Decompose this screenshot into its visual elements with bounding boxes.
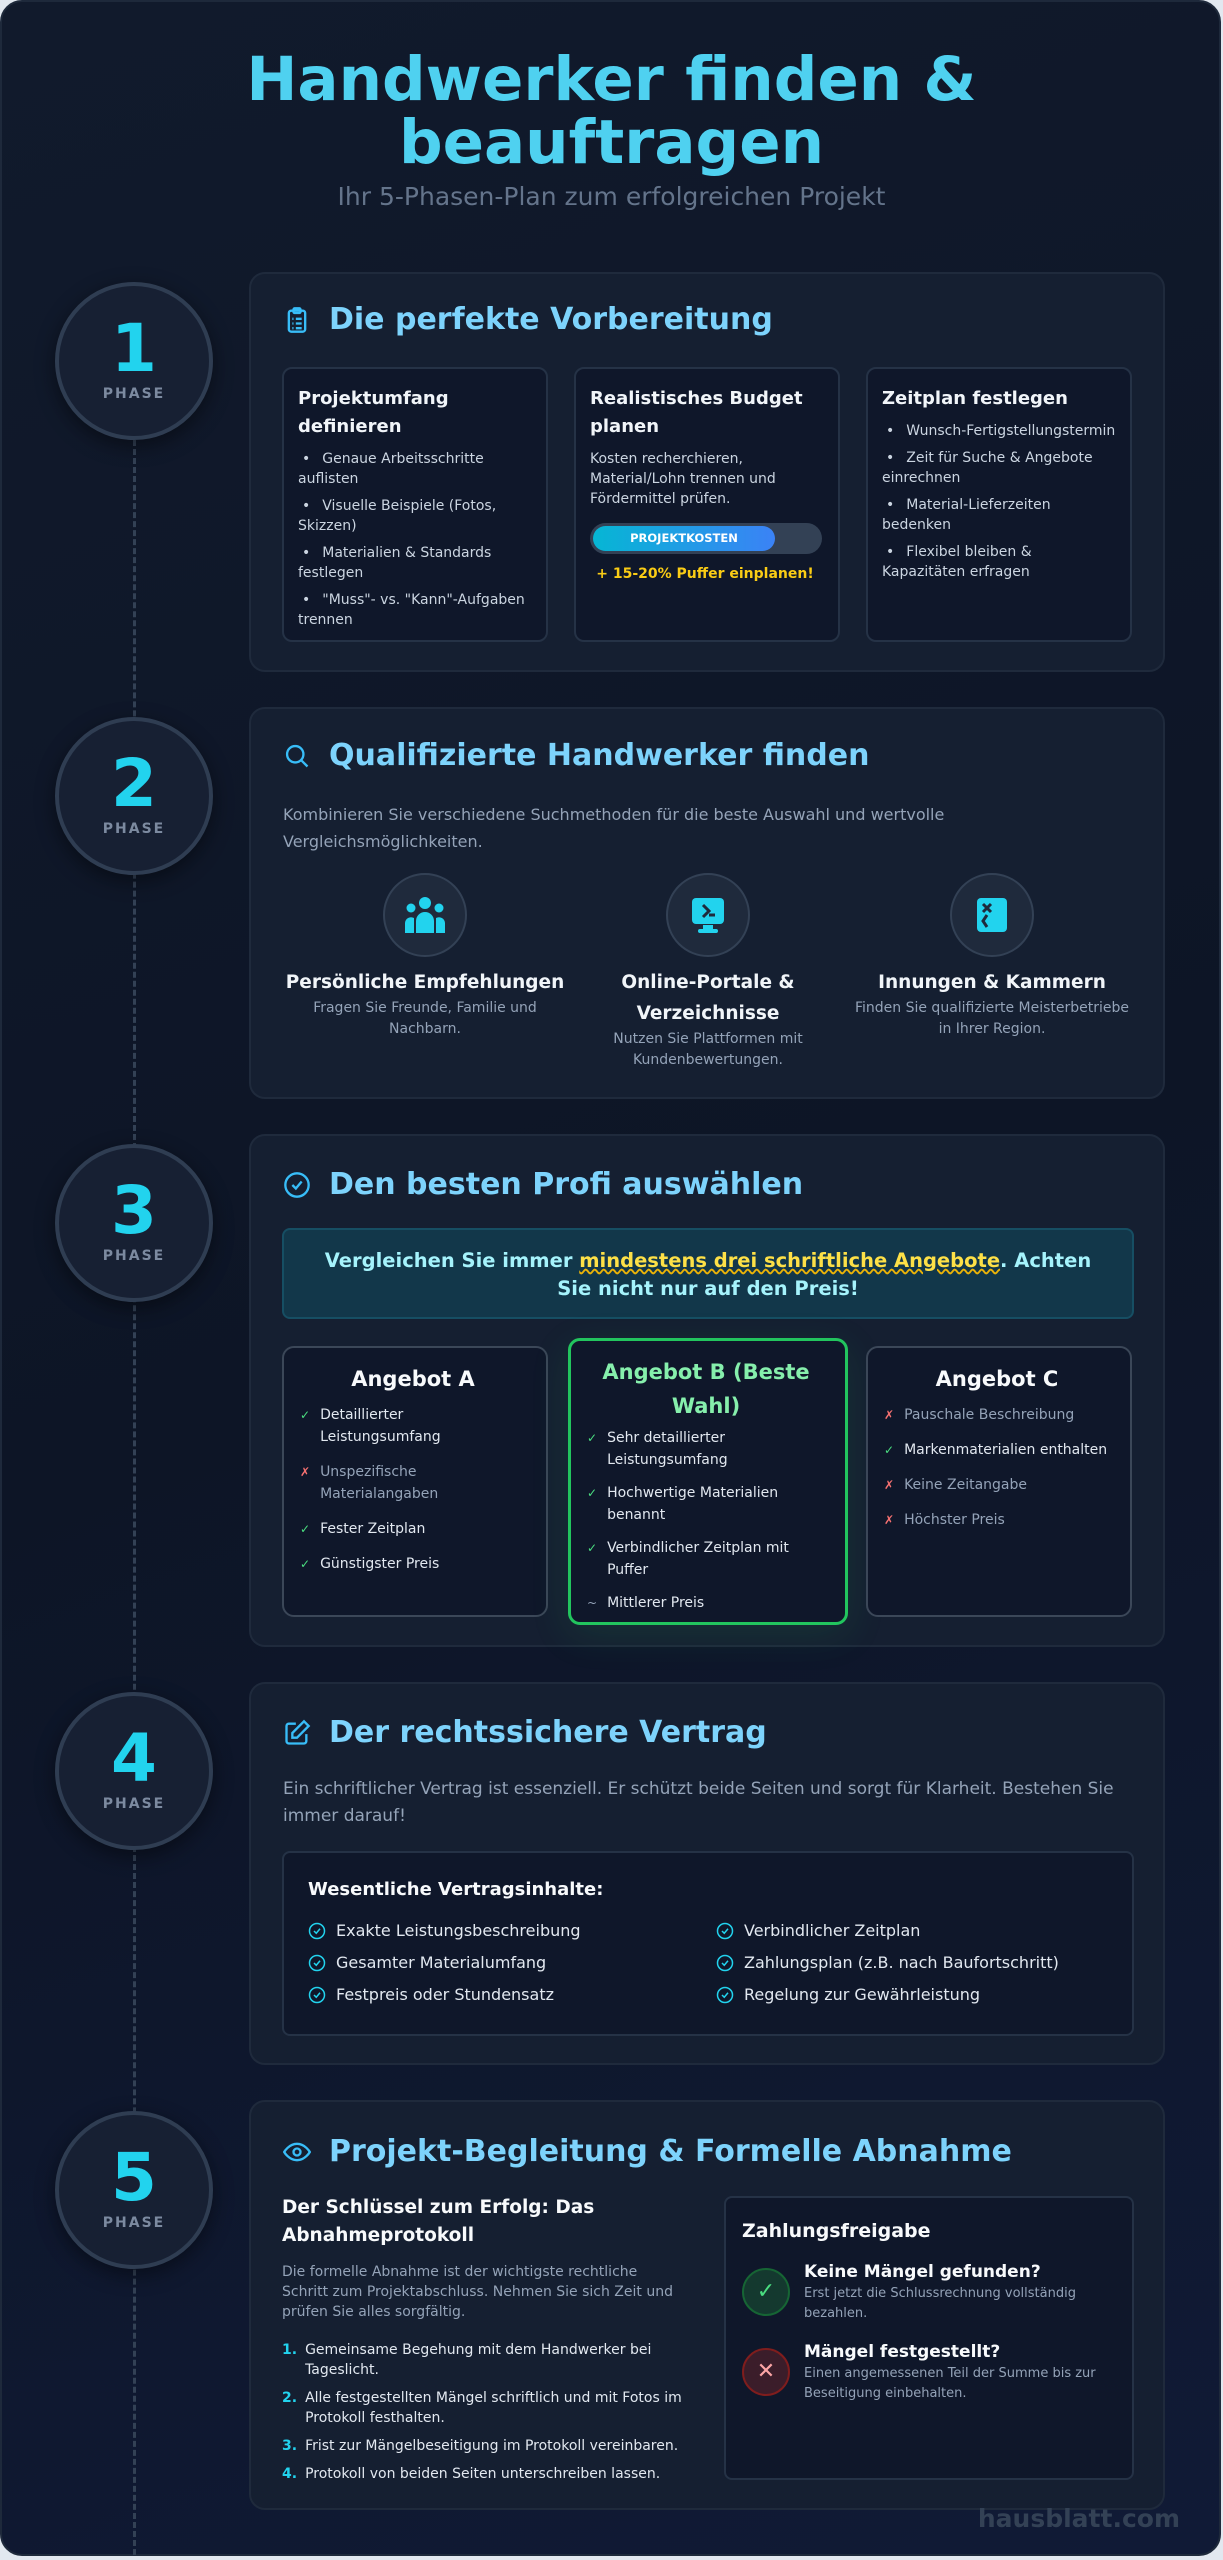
timeline dashed line bbox=[133, 440, 136, 2555]
card: Projektumfang: Genaue Arbeitsschritte auflisten bbox=[298, 451, 484, 487]
box: Vertragsinhalte: Festpreis oder Stundensatz bbox=[336, 1985, 554, 2004]
offer C: Pauschale Beschreibung bbox=[904, 1407, 1074, 1423]
heading phase 3: Den besten Profi auswählen bbox=[329, 1167, 803, 1202]
offer A: Fester Zeitplan bbox=[320, 1521, 425, 1537]
callout: drei Angebote: Vergleichen Sie immer mindestens drei schriftliche Angebote. Achten Sie nicht nur auf den Preis! bbox=[325, 1249, 1091, 1300]
icon: people bbox=[383, 873, 467, 957]
offer C: Höchster Preis bbox=[904, 1512, 1005, 1528]
item: Mängel festgestellt: Mängel festgestellt? bbox=[804, 2342, 1000, 2362]
card: Projektumfang: "Muss"- vs. "Kann"-Aufgaben trennen bbox=[298, 592, 525, 628]
icon: certificate bbox=[950, 873, 1034, 957]
phase 3 badge: 3 bbox=[111, 1172, 157, 1249]
callout: drei Angebote bbox=[282, 1228, 1134, 1319]
box: Vertragsinhalte: Gesamter Materialumfang bbox=[336, 1953, 546, 1972]
card: Projektumfang: Materialien & Standards festlegen bbox=[298, 545, 491, 581]
heading phase 4: Der rechtssichere Vertrag bbox=[329, 1715, 767, 1750]
footer brand: hausblatt.com bbox=[978, 2504, 1180, 2533]
method: Innungen: Innungen & Kammern bbox=[878, 972, 1106, 993]
heading phase 5: Projekt-Begleitung & Formelle Abnahme bbox=[329, 2134, 1012, 2169]
offer B best: Angebot B (Beste Wahl) bbox=[602, 1360, 810, 1418]
text block: Abnahmeprotokoll: Alle festgestellten Mängel schriftlich und mit Fotos im Protokoll festhalten. bbox=[305, 2390, 682, 2426]
panel: phase 1 Vorbereitung bbox=[249, 272, 1165, 672]
offer B best bbox=[568, 1338, 848, 1625]
offer B best: ✓ bbox=[587, 1431, 597, 1445]
card: Projektumfang: Projektumfang definieren bbox=[298, 388, 449, 437]
budget bar: PROJEKTKOSTEN bbox=[630, 531, 738, 545]
offer A: ✗ bbox=[300, 1465, 310, 1479]
phase 4 badge bbox=[55, 1692, 213, 1850]
offer C: ✗ bbox=[884, 1513, 894, 1527]
panel: phase 4 Vertrag bbox=[249, 1682, 1165, 2065]
method: Online-Portale: Online-Portale & bbox=[621, 972, 795, 993]
offer B best: Verbindlicher Zeitplan mit Puffer bbox=[607, 1540, 789, 1578]
method: Empfehlungen bbox=[286, 873, 564, 1037]
card: Zeitplan: Zeitplan festlegen bbox=[882, 388, 1068, 409]
offer B best: ✓ bbox=[587, 1541, 597, 1555]
phase 5 badge: 5 bbox=[111, 2139, 157, 2216]
card: Zeitplan bbox=[866, 367, 1132, 642]
offer C: ✗ bbox=[884, 1408, 894, 1422]
item: keine Mängel: Keine Mängel gefunden? bbox=[804, 2262, 1041, 2282]
box: Zahlungsfreigabe bbox=[724, 2196, 1134, 2480]
item: Mängel festgestellt bbox=[742, 2342, 1096, 2401]
phase 3 badge: PHASE bbox=[103, 1248, 165, 1264]
phase 1 badge: PHASE bbox=[103, 386, 165, 402]
offer A bbox=[282, 1346, 548, 1617]
box: Vertragsinhalte: Verbindlicher Zeitplan bbox=[744, 1921, 920, 1940]
buffer note: + 15-20% Puffer einplanen! bbox=[596, 566, 814, 582]
text block: Abnahmeprotokoll: Protokoll von beiden Seiten unterschreiben lassen. bbox=[305, 2466, 660, 2482]
card: Projektumfang: Visuelle Beispiele (Fotos, Skizzen) bbox=[298, 498, 496, 534]
method: Online-Portale: Verzeichnisse bbox=[637, 1003, 779, 1024]
panel: phase 2 Handwerker finden bbox=[249, 707, 1165, 1099]
text block: Abnahmeprotokoll: Die formelle Abnahme ist der wichtigste rechtliche Schritt zum Projektabschluss. Nehmen Sie sich Zeit und prüfen Sie alles sorgfältig. bbox=[282, 2264, 673, 2320]
offer A: Günstigster Preis bbox=[320, 1556, 439, 1572]
budget bar bbox=[590, 523, 822, 554]
offer B best: Sehr detaillierter Leistungsumfang bbox=[607, 1430, 728, 1468]
text block: Abnahmeprotokoll: 2. bbox=[282, 2390, 297, 2406]
panel: phase 5 Abnahme bbox=[249, 2100, 1165, 2510]
card: Zeitplan: Zeit für Suche & Angebote einrechnen bbox=[882, 450, 1093, 486]
method: Online-Portale bbox=[613, 873, 803, 1068]
offer A: Angebot A bbox=[351, 1367, 475, 1391]
item: keine Mängel: ✓ bbox=[757, 2279, 775, 2304]
card: Projektumfang bbox=[282, 367, 548, 642]
phase 4 badge: 4 bbox=[111, 1720, 157, 1797]
phase 3 badge bbox=[55, 1144, 213, 1302]
item: keine Mängel bbox=[742, 2262, 1076, 2321]
box: Zahlungsfreigabe: Zahlungsfreigabe bbox=[742, 2220, 931, 2242]
heading phase 2: Qualifizierte Handwerker finden bbox=[329, 738, 869, 773]
item: Mängel festgestellt: ✕ bbox=[757, 2359, 775, 2384]
offer C: ✓ bbox=[884, 1443, 894, 1457]
offer A: ✓ bbox=[300, 1408, 310, 1422]
title: beauftragen bbox=[399, 107, 824, 178]
icon: monitor bbox=[666, 873, 750, 957]
text block: Abnahmeprotokoll: 4. bbox=[282, 2466, 297, 2482]
offer A: Unspezifische Materialangaben bbox=[320, 1464, 438, 1502]
item: Mängel festgestellt: Einen angemessenen Teil der Summe bis zur Beseitigung einbehalten. bbox=[804, 2366, 1096, 2401]
title bbox=[246, 44, 977, 178]
phase 2 badge: 2 bbox=[111, 745, 157, 822]
phase 5 badge: PHASE bbox=[103, 2215, 165, 2231]
text block: Abnahmeprotokoll: Frist zur Mängelbeseitigung im Protokoll vereinbaren. bbox=[305, 2438, 678, 2454]
method: Empfehlungen: Fragen Sie Freunde, Familie und Nachbarn. bbox=[313, 1000, 537, 1037]
heading phase 1: Die perfekte Vorbereitung bbox=[329, 302, 773, 337]
card: Zeitplan: Flexibel bleiben & Kapazitäten erfragen bbox=[882, 544, 1032, 580]
phase 2 badge bbox=[55, 717, 213, 875]
box: Vertragsinhalte: Wesentliche Vertragsinhalte: bbox=[308, 1879, 603, 1900]
method: Online-Portale: Nutzen Sie Plattformen mit Kundenbewertungen. bbox=[613, 1031, 803, 1068]
offer B best: Mittlerer Preis bbox=[607, 1595, 704, 1611]
box: Vertragsinhalte: Regelung zur Gewährleistung bbox=[744, 1985, 980, 2004]
text block: Abnahmeprotokoll: Der Schlüssel zum Erfolg: Das Abnahmeprotokoll bbox=[282, 2197, 594, 2246]
phase 1 badge bbox=[55, 282, 213, 440]
phase 5 badge bbox=[55, 2111, 213, 2269]
offer A: Detaillierter Leistungsumfang bbox=[320, 1407, 441, 1445]
text block: Abnahmeprotokoll bbox=[282, 2197, 682, 2482]
box: Vertragsinhalte: Exakte Leistungsbeschreibung bbox=[336, 1921, 581, 1940]
card: Zeitplan: Material-Lieferzeiten bedenken bbox=[882, 497, 1051, 533]
title: Handwerker finden & bbox=[246, 44, 977, 115]
offer A: ✓ bbox=[300, 1557, 310, 1571]
text block: Abnahmeprotokoll: Gemeinsame Begehung mit dem Handwerker bei Tageslicht. bbox=[305, 2342, 651, 2378]
card: Budget: Realistisches Budget planen bbox=[590, 388, 803, 437]
text block: Abnahmeprotokoll: 1. bbox=[282, 2342, 297, 2358]
card: Zeitplan: Wunsch-Fertigstellungstermin bbox=[906, 423, 1115, 439]
phase 1 badge: 1 bbox=[111, 310, 157, 387]
offer C: Angebot C bbox=[936, 1367, 1058, 1391]
offer B best: ✓ bbox=[587, 1486, 597, 1500]
subtitle: Ihr 5-Phasen-Plan zum erfolgreichen Projekt bbox=[338, 182, 885, 211]
description phase 2: Kombinieren Sie verschiedene Suchmethoden für die beste Auswahl und wertvolle Vergleichsmöglichkeiten. bbox=[283, 805, 944, 851]
text block: Abnahmeprotokoll: 3. bbox=[282, 2438, 297, 2454]
method: Empfehlungen: Persönliche Empfehlungen bbox=[286, 972, 564, 993]
method: Innungen: Finden Sie qualifizierte Meisterbetriebe in Ihrer Region. bbox=[855, 1000, 1129, 1037]
box: Vertragsinhalte: Zahlungsplan (z.B. nach Baufortschritt) bbox=[744, 1953, 1059, 1972]
phase 2 badge: PHASE bbox=[103, 821, 165, 837]
offer A: ✓ bbox=[300, 1522, 310, 1536]
offer B best: ~ bbox=[587, 1596, 597, 1610]
card: Budget: Kosten recherchieren, Material/Lohn trennen und Fördermittel prüfen. bbox=[590, 451, 776, 507]
offer C: ✗ bbox=[884, 1478, 894, 1492]
card: Budget bbox=[574, 367, 840, 642]
offer C: Markenmaterialien enthalten bbox=[904, 1442, 1107, 1458]
item: keine Mängel: Erst jetzt die Schlussrechnung vollständig bezahlen. bbox=[804, 2286, 1076, 2321]
panel: phase 3 Profi auswählen bbox=[249, 1134, 1165, 1647]
description phase 4: Ein schriftlicher Vertrag ist essenziell. Er schützt beide Seiten und sorgt für Klarheit. Bestehen Sie immer darauf! bbox=[283, 1779, 1114, 1826]
offer C: Keine Zeitangabe bbox=[904, 1477, 1027, 1493]
method: Innungen bbox=[855, 873, 1129, 1037]
offer B best: Hochwertige Materialien benannt bbox=[607, 1485, 778, 1523]
box: Vertragsinhalte bbox=[282, 1851, 1134, 2036]
phase 4 badge: PHASE bbox=[103, 1796, 165, 1812]
offer C bbox=[866, 1346, 1132, 1617]
